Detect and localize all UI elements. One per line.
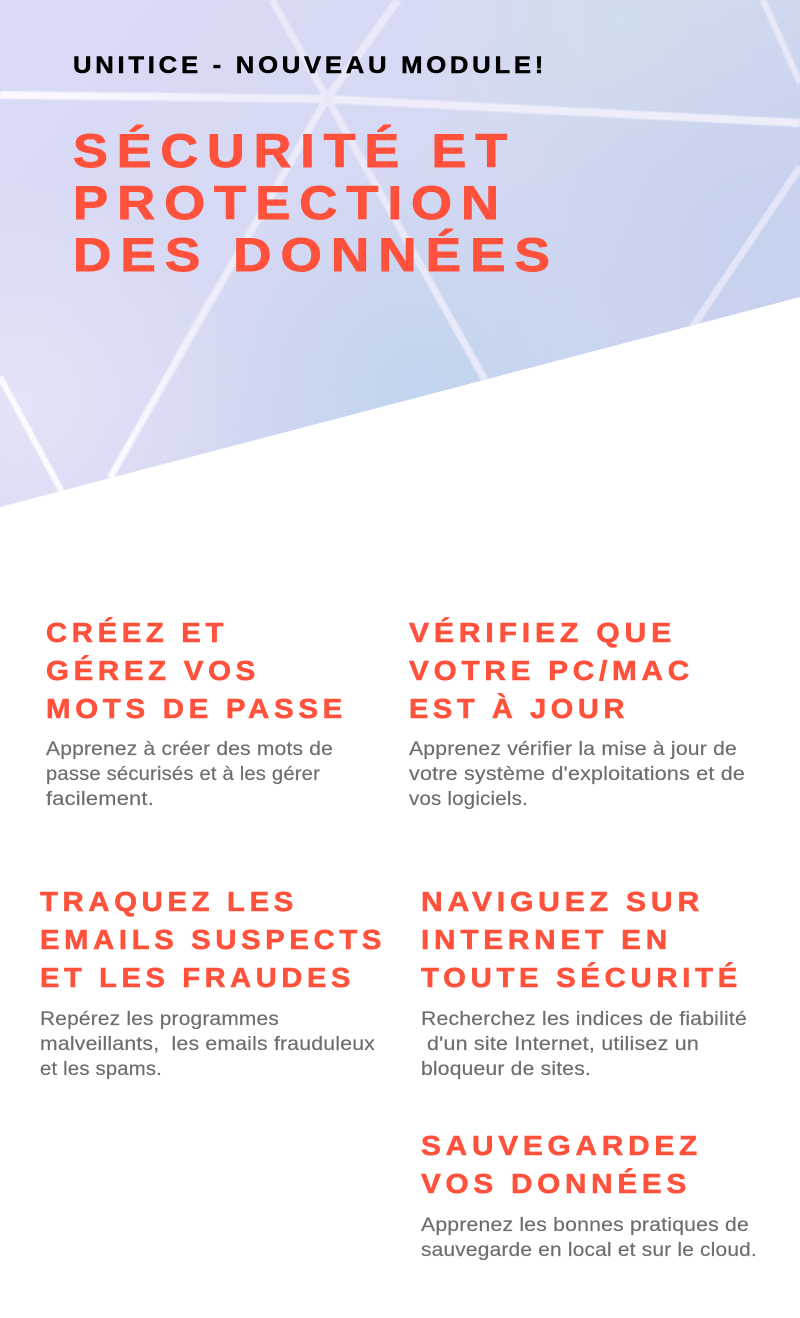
section: backups xyxy=(421,1130,757,1261)
heading: updates: VOTRE PC/MAC xyxy=(409,655,694,686)
text: updates: votre système d'exploitations et de xyxy=(409,764,745,785)
heading: safe browsing: NAVIGUEZ SUR xyxy=(421,886,704,917)
text: suspicious emails: Repérez les programmes xyxy=(40,1009,279,1030)
text: updates xyxy=(409,739,745,810)
heading: safe browsing xyxy=(421,886,742,993)
heading: safe browsing: INTERNET EN xyxy=(421,924,672,955)
heading: backups xyxy=(421,1130,702,1199)
text: suspicious emails: malveillants, les emails frauduleux xyxy=(40,1034,375,1055)
text: passwords: Apprenez à créer des mots de xyxy=(46,739,333,760)
heading: passwords: MOTS DE PASSE xyxy=(46,693,347,724)
text: passwords xyxy=(46,739,333,810)
heading: updates xyxy=(409,617,694,724)
heading: safe browsing: TOUTE SÉCURITÉ xyxy=(421,962,742,993)
heading: updates: VÉRIFIEZ QUE xyxy=(409,617,676,648)
main title: PROTECTION xyxy=(73,176,508,229)
text: suspicious emails xyxy=(40,1009,375,1080)
text: safe browsing: Recherchez les indices de fiabilité xyxy=(421,1009,747,1030)
text: safe browsing: bloqueur de sites. xyxy=(421,1059,591,1080)
hero background image xyxy=(0,0,800,520)
heading: updates: EST À JOUR xyxy=(409,693,629,724)
main title: DES DONNÉES xyxy=(73,228,559,281)
text: updates: Apprenez vérifier la mise à jour de xyxy=(409,739,737,760)
heading: passwords: CRÉEZ ET xyxy=(46,617,228,648)
text: safe browsing: d'un site Internet, utilisez un xyxy=(427,1034,699,1055)
text: backups xyxy=(421,1215,757,1261)
text: updates: vos logiciels. xyxy=(409,789,528,810)
text: passwords: passe sécurisés et à les gérer xyxy=(46,764,320,785)
heading: backups: SAUVEGARDEZ xyxy=(421,1130,702,1161)
eyebrow heading: UNITICE - NOUVEAU MODULE! xyxy=(73,52,547,79)
heading: suspicious emails: TRAQUEZ LES xyxy=(40,886,298,917)
text: safe browsing xyxy=(421,1009,747,1080)
heading: backups: VOS DONNÉES xyxy=(421,1168,691,1199)
heading: passwords: GÉREZ VOS xyxy=(46,655,260,686)
text: suspicious emails: et les spams. xyxy=(40,1059,162,1080)
section: safe browsing xyxy=(421,886,747,1080)
section: updates xyxy=(409,617,745,810)
text: passwords: facilement. xyxy=(46,789,154,810)
section: suspicious emails xyxy=(40,886,386,1080)
text: backups: Apprenez les bonnes pratiques de xyxy=(421,1215,749,1236)
heading: passwords xyxy=(46,617,347,724)
main title xyxy=(73,124,559,281)
section: passwords xyxy=(46,617,347,810)
heading: suspicious emails: ET LES FRAUDES xyxy=(40,962,355,993)
heading: suspicious emails: EMAILS SUSPECTS xyxy=(40,924,386,955)
heading: suspicious emails xyxy=(40,886,386,993)
text: backups: sauvegarde en local et sur le cloud. xyxy=(421,1240,757,1261)
main title: SÉCURITÉ ET xyxy=(73,124,516,177)
